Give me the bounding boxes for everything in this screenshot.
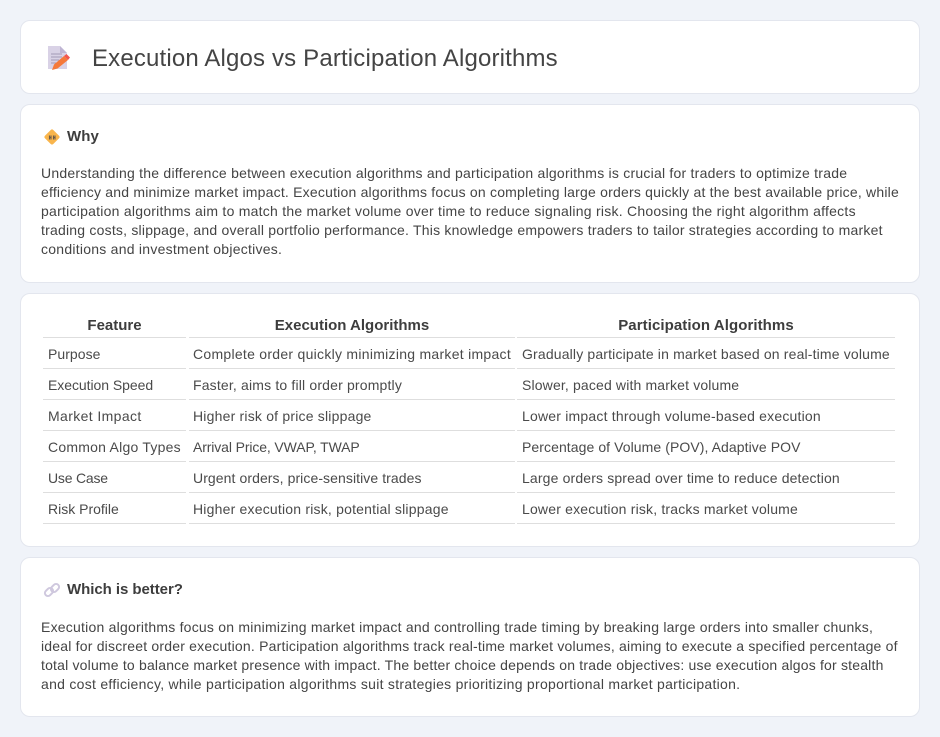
text block: which is better: Execution algorithms focus on minimizing market impact and controlling trade timing by breaking large orders into smaller chunks, (41, 619, 873, 635)
text block: why: Understanding the difference between execution algorithms and participation algorithms is crucial for traders to optimize trade (41, 165, 847, 181)
text block: why: efficiency and minimize market impact. Execution algorithms focus on completing large orders quickly at the best available price, while (41, 184, 899, 200)
text: Slower, paced with market volume (522, 377, 739, 393)
heading: which is better: Which is better? (67, 581, 183, 598)
row: purpose: Purpose (48, 346, 100, 362)
title: Execution Algos vs Participation Algorithms (92, 45, 558, 72)
row: common algo types: Common Algo Types (48, 439, 181, 455)
text: Higher execution risk, potential slippage (193, 501, 449, 517)
table header: execution algorithms: Execution Algorithms (275, 317, 429, 334)
panel: header (20, 20, 920, 94)
text block: why: participation algorithms aim to match the market volume over time to reduce signaling risk. Choosing the right algorithm affects (41, 203, 856, 219)
text: Lower execution risk, tracks market volume (522, 501, 798, 517)
icon: document with pencil (48, 46, 70, 70)
text block: why: conditions and investment objectives. (41, 241, 282, 257)
text: Complete order quickly minimizing market impact (193, 346, 511, 362)
table header: feature: Feature (87, 317, 142, 334)
heading: why: Why (67, 128, 99, 145)
text block: which is better (41, 619, 898, 692)
panel: comparison table (20, 293, 920, 547)
panel: why (20, 104, 920, 283)
table header: participation algorithms: Participation Algorithms (618, 317, 794, 334)
text: Higher risk of price slippage (193, 408, 372, 424)
text block: why (41, 165, 899, 257)
text block: which is better: and cost efficiency, while participation algorithms suit strategies prioritizing proportional market participation. (41, 676, 740, 692)
text: Arrival Price, VWAP, TWAP (193, 439, 360, 455)
row: use case: Use Case (48, 470, 108, 486)
row: market impact: Market Impact (48, 408, 142, 424)
icon: warning diamond (44, 129, 60, 145)
row: execution speed: Execution Speed (48, 377, 153, 393)
text: Urgent orders, price-sensitive trades (193, 470, 422, 486)
text: Lower impact through volume-based execution (522, 408, 821, 424)
text block: which is better: ideal for discreet order execution. Participation algorithms track real-time market volumes, aiming to execute a specified percentage of (41, 638, 898, 654)
text: Gradually participate in market based on real-time volume (522, 346, 890, 362)
text: Faster, aims to fill order promptly (193, 377, 402, 393)
text: Large orders spread over time to reduce detection (522, 470, 840, 486)
text block: which is better: total volume to balance market presence with impact. The better choice depends on trade objectives: use execution algos for stealth (41, 657, 884, 673)
panel: which is better (20, 557, 920, 717)
icon: chain link (44, 583, 60, 597)
text block: why: trading costs, slippage, and overall portfolio performance. This knowledge empowers traders to tailor strategies according to market (41, 222, 883, 238)
text: Percentage of Volume (POV), Adaptive POV (522, 439, 800, 455)
row: risk profile: Risk Profile (48, 501, 119, 517)
